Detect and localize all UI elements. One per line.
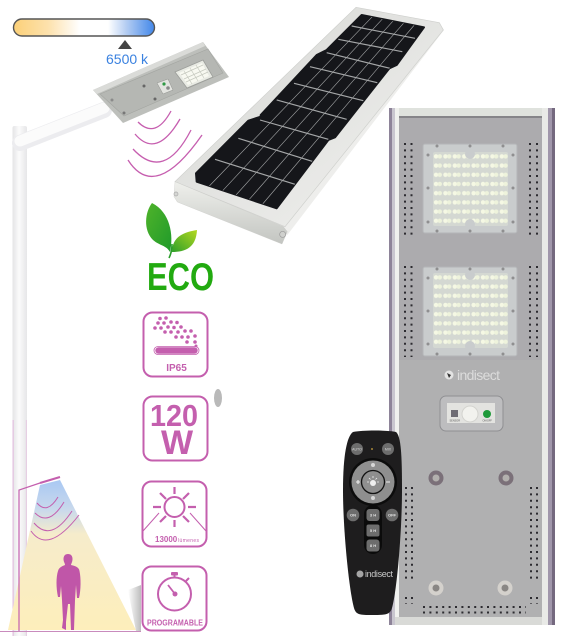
rain drops (153, 316, 198, 348)
icon: leaves (146, 203, 197, 258)
direction pad (349, 458, 397, 506)
mounting screws (428, 470, 514, 596)
lamp bar (155, 347, 198, 354)
LED module lower (423, 267, 517, 356)
usage scene: person under lamp (0, 477, 141, 632)
icon: IP65 waterproof (144, 312, 208, 376)
stopwatch (158, 572, 191, 610)
timer buttons: 5 H (370, 528, 376, 533)
solar cells (196, 15, 424, 208)
sensor waves (128, 111, 202, 176)
icon: 13000 lumens (142, 482, 206, 546)
remote brand: indisect (365, 569, 393, 579)
grey fragment (214, 389, 222, 407)
sensor module (440, 396, 503, 431)
panel frame side (282, 23, 444, 235)
lumens label: 13000 (155, 535, 178, 544)
ground shadow (128, 585, 141, 631)
IP65 label: IP65 (166, 363, 187, 374)
panel frame front (174, 182, 287, 244)
street light pole (12, 108, 104, 636)
on off buttons (347, 509, 398, 521)
top buttons (351, 443, 394, 455)
lamp sensor (157, 79, 173, 94)
large lamp front view (389, 108, 555, 625)
timer buttons: 8 H (370, 543, 376, 548)
top buttons: AUTO (352, 448, 362, 452)
lamp body panel (399, 116, 542, 617)
person silhouette (56, 554, 81, 630)
icon: programmable timer (142, 566, 206, 630)
eco logo (146, 203, 214, 299)
small lamp post (19, 483, 40, 631)
colour temperature bar (14, 19, 154, 67)
sensor module: ON/OFF (482, 420, 492, 422)
wattage unit: W (161, 424, 194, 462)
top buttons: MIX (385, 448, 392, 452)
icon: 13000 lumens: lúmenes (178, 538, 200, 544)
sensor module: SENSOR (450, 420, 460, 422)
wattage number: 120 (150, 398, 198, 433)
sun (143, 487, 206, 531)
small lamp head (93, 42, 229, 123)
light beam (8, 480, 136, 630)
on off buttons: ON (350, 512, 356, 518)
lamp LED module (175, 60, 213, 88)
panel frame top (175, 7, 443, 227)
small sensor waves (31, 497, 79, 540)
remote control (343, 430, 402, 615)
eco text: ECO (147, 256, 214, 299)
timer buttons (364, 505, 382, 554)
LED module upper (423, 144, 517, 233)
marker triangle (118, 40, 132, 49)
lamp frame (389, 108, 555, 625)
timer buttons: 3 H (370, 512, 376, 518)
solar panel (174, 7, 444, 244)
ground line (0, 630, 141, 632)
ventilation dots (405, 143, 537, 612)
colour temperature value: 6500 k (106, 51, 149, 67)
brand logo: indisect (457, 367, 500, 383)
icon: 120 W power (144, 396, 208, 462)
programable label: PROGRAMABLE (147, 618, 204, 628)
on off buttons: OFF (388, 512, 397, 518)
